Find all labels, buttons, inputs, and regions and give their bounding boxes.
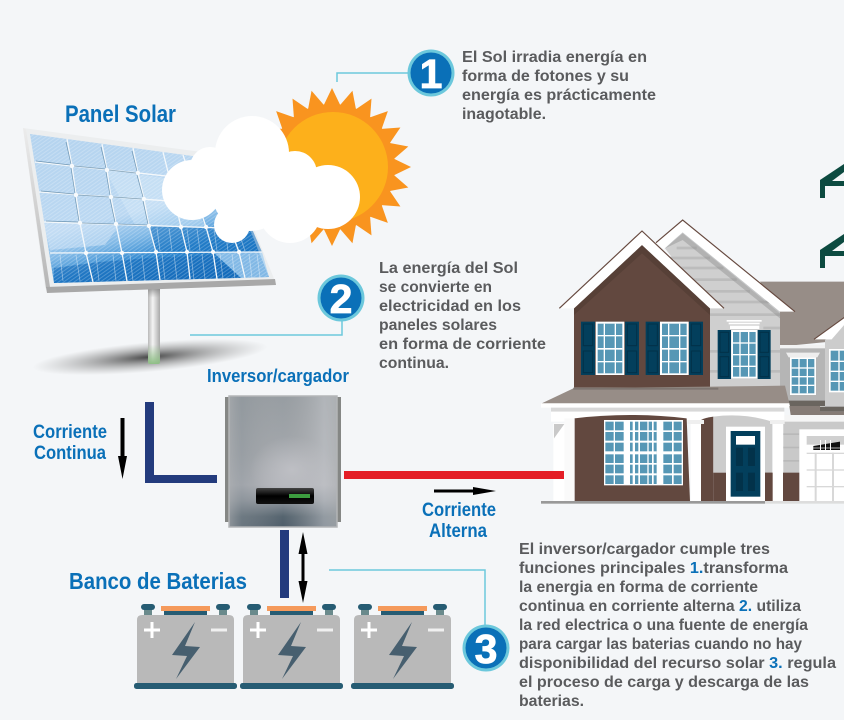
text: step 3: baterias.	[519, 693, 584, 710]
wire: inverter to batteries	[280, 530, 289, 598]
icon: inverter	[225, 396, 341, 527]
text: step 3: disponibilidad del recurso solar 3. regula	[519, 655, 836, 672]
panel cells	[30, 134, 269, 283]
leader line 3	[329, 570, 485, 628]
text: step 1: inagotable.	[462, 106, 546, 123]
leader line 2	[190, 318, 342, 335]
text: step 3: para cargar las baterias cuando no hay	[519, 636, 802, 653]
brown gable trim	[559, 231, 724, 308]
arrow: down	[118, 418, 127, 479]
text: step 3: funciones principales 1.transforma	[519, 560, 788, 577]
wire: alternating current	[344, 471, 564, 479]
heading: Panel Solar: Panel Solar	[65, 101, 176, 128]
battery 2	[240, 604, 343, 689]
badge 3	[462, 624, 510, 672]
icon: solar panel	[23, 128, 276, 382]
text: step 2: electricidad en los	[379, 298, 521, 315]
text: step 2: en forma de corriente	[379, 336, 546, 353]
back roof	[760, 282, 844, 347]
grey gable siding	[665, 232, 780, 387]
label: Corriente Continua: Corriente	[33, 421, 107, 443]
door	[726, 427, 765, 501]
battery 1	[134, 604, 237, 689]
text: step 3	[519, 541, 836, 710]
large window	[604, 420, 683, 485]
upstairs windows	[581, 320, 771, 379]
panel frame	[23, 128, 276, 293]
label: Corriente Continua	[33, 421, 107, 464]
icon: house	[541, 220, 844, 504]
arrow: right	[434, 487, 496, 495]
heading: Banco de Baterias: Banco de Baterias	[69, 568, 247, 594]
battery 3	[351, 604, 454, 689]
ground line	[541, 501, 844, 504]
grey gable trim	[656, 220, 795, 312]
text: step 3: El inversor/cargador cumple tres	[519, 541, 770, 558]
right wing	[765, 313, 844, 501]
panel shadow	[31, 332, 269, 382]
heading: Inversor/cargador: Inversor/cargador	[207, 366, 349, 386]
leader line 1	[337, 73, 412, 82]
wire: direct current panel to inverter	[145, 402, 217, 483]
text: step 2	[379, 260, 546, 372]
icon: cloud	[162, 116, 360, 243]
ground floor	[541, 415, 844, 504]
label: Corriente Alterna: Corriente	[422, 499, 496, 521]
text: step 2: continua.	[379, 355, 449, 372]
label: Corriente Alterna: Alterna	[429, 520, 487, 542]
text: step 3: continua en corriente alterna 2. utiliza	[519, 598, 801, 615]
text: step 2: La energía del Sol	[379, 260, 518, 277]
cell junction dots	[70, 164, 241, 255]
badge 2	[318, 274, 364, 322]
panel pole	[148, 286, 160, 364]
porch roof	[541, 386, 789, 422]
badge 3: 3	[475, 626, 497, 672]
brown gable wall	[574, 245, 710, 388]
batteries	[134, 604, 454, 689]
badge 1: 1	[420, 51, 442, 97]
text: step 1	[462, 49, 656, 123]
roof fragment lower	[820, 234, 844, 268]
text: step 3: el proceso de carga y descarga de las	[519, 674, 809, 691]
text: step 3: la red electrica o una fuente de energía	[519, 617, 808, 634]
text: step 2: se convierte en	[379, 279, 492, 296]
text: step 3: la energia en forma de corriente	[519, 579, 758, 596]
text: step 1: forma de fotones y su	[462, 68, 629, 85]
inverter display	[256, 488, 314, 504]
text: step 1: energía es prácticamente	[462, 87, 656, 104]
badge 1	[408, 50, 454, 97]
icon: sun	[253, 88, 411, 246]
label: Corriente Alterna	[422, 499, 496, 542]
badge 2: 2	[330, 276, 352, 322]
text: step 1: El Sol irradia energía en	[462, 49, 647, 66]
arrow: double vertical	[298, 532, 308, 603]
roof fragment upper	[820, 164, 844, 198]
label: Corriente Continua: Continua	[34, 442, 106, 464]
text: step 2: paneles solares	[379, 317, 497, 334]
